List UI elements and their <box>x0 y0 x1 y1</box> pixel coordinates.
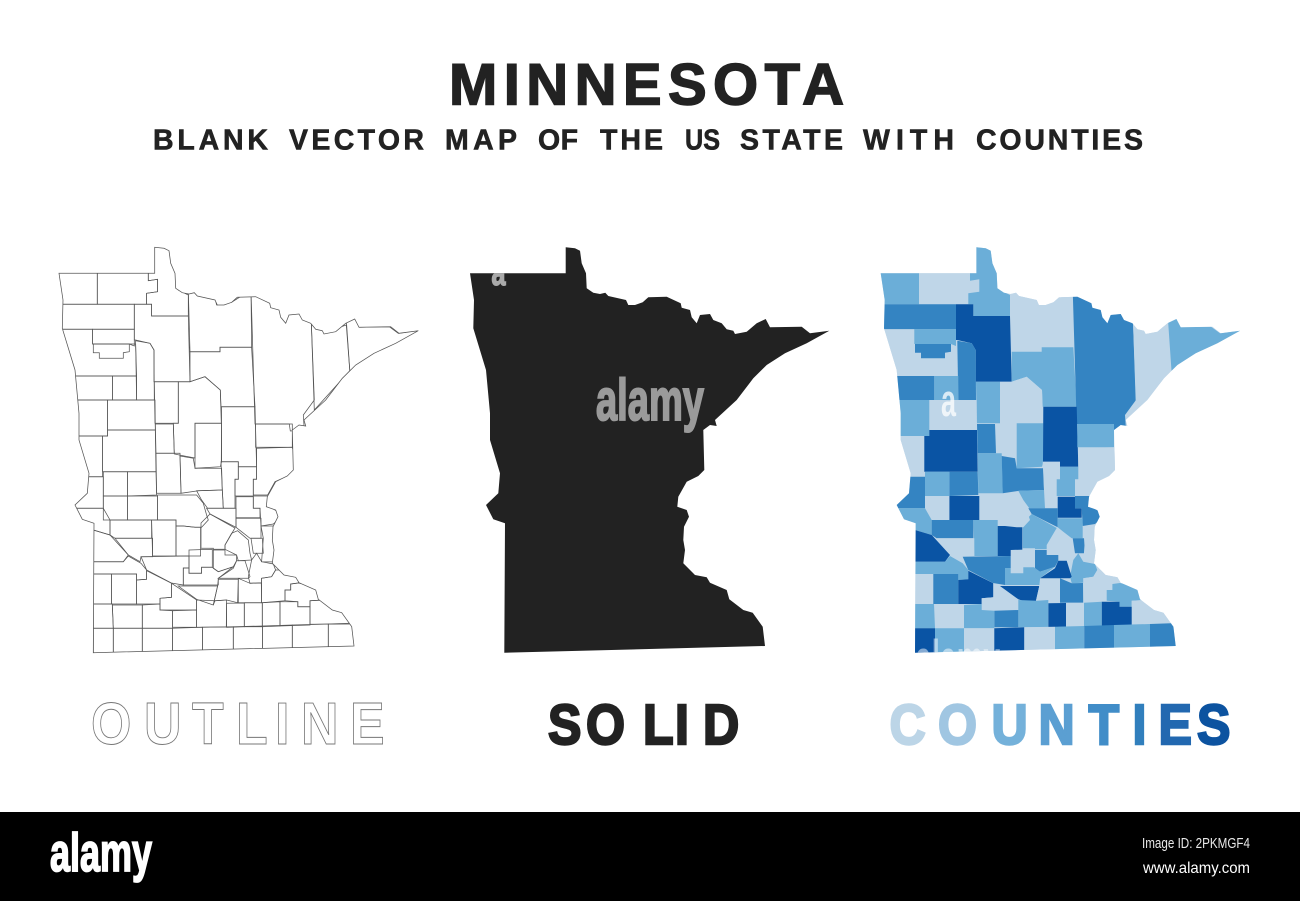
subtitle <box>153 124 1143 156</box>
subtitle: US <box>685 124 720 156</box>
subtitle: COUNTIES <box>976 124 1143 156</box>
label: solid: SOLID <box>548 693 739 757</box>
watermark: letter on counties: a <box>941 375 957 426</box>
label: counties: CO UNTIES <box>890 693 1230 757</box>
map: counties <box>878 245 1242 690</box>
watermark: bottom counties: alamy <box>915 628 1000 690</box>
footer bar <box>0 812 1300 901</box>
footer image id: Image ID: 2PKMGF4 <box>1142 835 1250 852</box>
subtitle: WITH <box>863 124 954 156</box>
map: solid <box>470 247 829 653</box>
watermark: small letter: a <box>492 252 506 293</box>
subtitle: BLANK <box>153 124 268 156</box>
subtitle: THE <box>600 124 663 156</box>
map: outline <box>56 245 420 655</box>
subtitle: OF <box>538 124 578 156</box>
subtitle: MAP <box>445 124 517 156</box>
footer url: www.alamy.com <box>1142 860 1250 877</box>
title: MINNESOTA <box>449 52 844 118</box>
footer logo: alamy <box>50 823 152 883</box>
subtitle: VECTOR <box>289 124 424 156</box>
subtitle: STATE <box>740 124 843 156</box>
watermark: alamy centre: alamy <box>596 368 704 433</box>
label: outline: OUTLINE <box>91 691 385 757</box>
